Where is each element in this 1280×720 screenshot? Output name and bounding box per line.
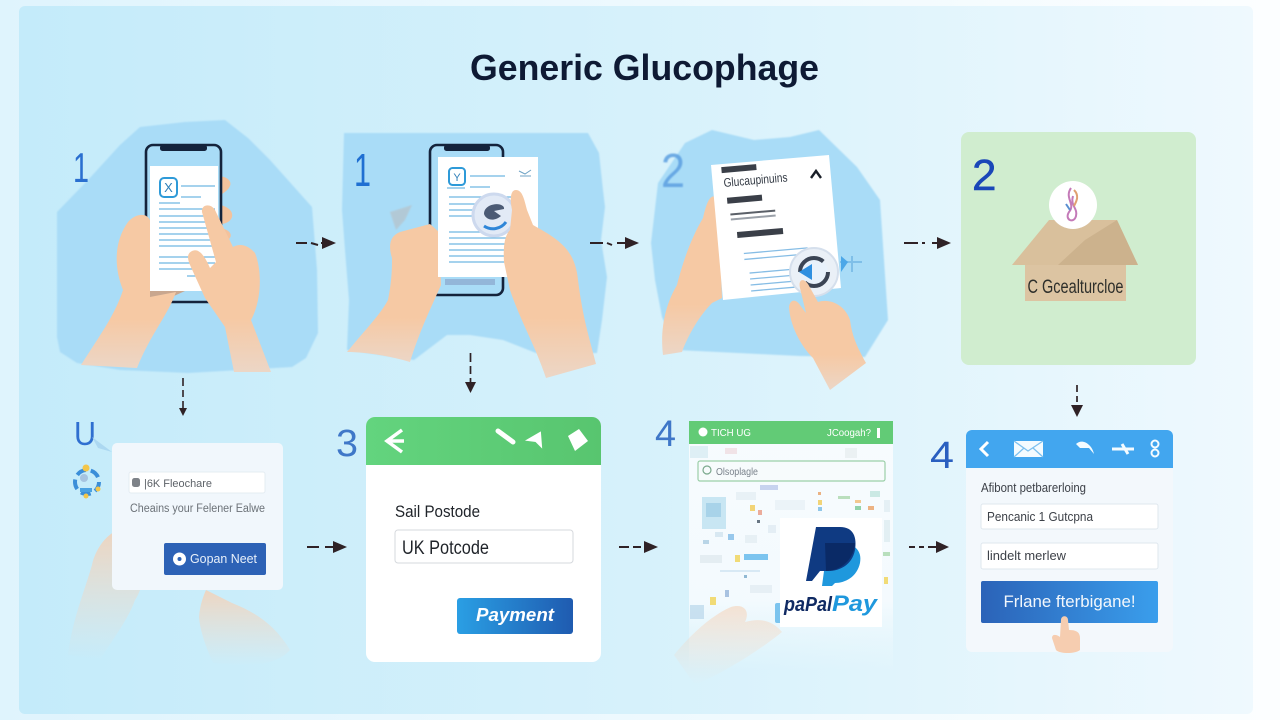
form heading: Glucaupinuins	[723, 170, 788, 190]
arrow: review to package	[904, 237, 951, 249]
field label: Sail Postode	[395, 502, 480, 521]
globe icon	[75, 464, 100, 498]
right hand	[199, 590, 290, 666]
step number: U	[74, 415, 96, 452]
app logo	[160, 178, 177, 197]
phone: X	[164, 180, 173, 195]
step number: 2	[661, 145, 685, 198]
arrow: document down	[465, 353, 476, 393]
arrow: postcode to PayPal	[619, 541, 658, 553]
step number: 1	[354, 144, 371, 196]
form caption: Afibont petbarerloing	[981, 481, 1086, 495]
document	[438, 157, 538, 277]
panel: step 4 confirmation card	[930, 430, 1173, 653]
confirm button	[981, 581, 1158, 623]
step number: 3	[336, 423, 358, 465]
input field 1	[981, 504, 1158, 529]
background blob	[651, 130, 888, 357]
left hand	[68, 532, 141, 660]
blue header	[966, 430, 1173, 468]
green header: JCoogah?	[827, 428, 871, 439]
panel: step 2 package	[961, 132, 1196, 365]
step number: 1	[73, 144, 89, 191]
arrow: step 1 to next	[296, 237, 336, 249]
cardboard box	[1012, 220, 1138, 301]
hand holding form	[662, 196, 722, 355]
panel: step 3 postcode card	[336, 417, 601, 662]
payment button	[457, 598, 573, 634]
arrow: account to postcode	[307, 541, 347, 553]
arrow: document to review	[590, 237, 639, 249]
PayPal card: Pay	[832, 591, 879, 616]
green header	[366, 417, 601, 465]
panel: step 1 document	[342, 133, 607, 378]
badge circle	[1049, 181, 1097, 229]
input field	[395, 530, 573, 563]
magnifier badge	[790, 248, 838, 296]
arrow: phone down	[179, 378, 187, 416]
input field	[129, 472, 265, 493]
cursor hand	[1052, 616, 1080, 653]
card body	[366, 417, 601, 662]
background blob	[57, 120, 318, 373]
step number: 4	[930, 435, 954, 477]
fingers behind phone	[220, 176, 232, 242]
document lines	[159, 186, 217, 276]
pointing hand	[789, 280, 866, 390]
PayPal card	[780, 518, 882, 627]
search box: Olsoplagle	[716, 467, 758, 478]
hand	[674, 606, 782, 685]
card	[112, 443, 283, 590]
button	[164, 543, 266, 575]
card body	[966, 430, 1173, 652]
step number: 4	[655, 413, 676, 454]
page background	[689, 421, 893, 671]
input field 2: lindelt merlew	[987, 549, 1067, 563]
input field 1: Pencanic 1 Gutcpna	[987, 510, 1093, 524]
faint floating shape	[390, 205, 412, 230]
map of small content tiles	[690, 446, 890, 623]
phone	[430, 145, 503, 295]
right hand	[504, 190, 596, 378]
input field: UK Potcode	[402, 538, 489, 559]
input field: |6K Fleochare	[144, 478, 212, 490]
helper text: Cheains your Felener Ealwe	[130, 503, 265, 515]
PayPal logo	[822, 543, 860, 586]
input field 2	[981, 543, 1158, 569]
dropper	[840, 256, 862, 272]
PayPal wordmark: paPal	[783, 594, 832, 616]
green header: TICH UG	[711, 428, 751, 439]
panel: step 4 account card	[68, 415, 290, 666]
arrow: package down	[1071, 385, 1083, 417]
phone	[146, 145, 221, 302]
panel: step 1 phone	[57, 120, 318, 373]
left hand	[347, 224, 441, 362]
magnifier badge	[473, 194, 515, 236]
payment button: Payment	[476, 605, 555, 625]
right hand	[188, 205, 271, 372]
title: Generic Glucophage	[470, 47, 819, 88]
left hand	[81, 215, 176, 368]
chevron	[811, 171, 821, 178]
step number: 2	[972, 151, 996, 200]
panel: step 4 PayPal	[655, 413, 893, 685]
form sheet	[711, 155, 841, 300]
green header	[689, 421, 893, 444]
box label: C Gcealturcloe	[1028, 277, 1124, 298]
search box	[698, 461, 885, 481]
confirm button: Frlane fterbigane!	[1004, 592, 1136, 611]
arrow: PayPal to confirmation	[909, 541, 949, 553]
button: Gopan Neet	[190, 552, 258, 566]
panel: step 2 review form	[651, 130, 888, 390]
document: Y	[453, 172, 461, 184]
background blob	[342, 133, 607, 360]
